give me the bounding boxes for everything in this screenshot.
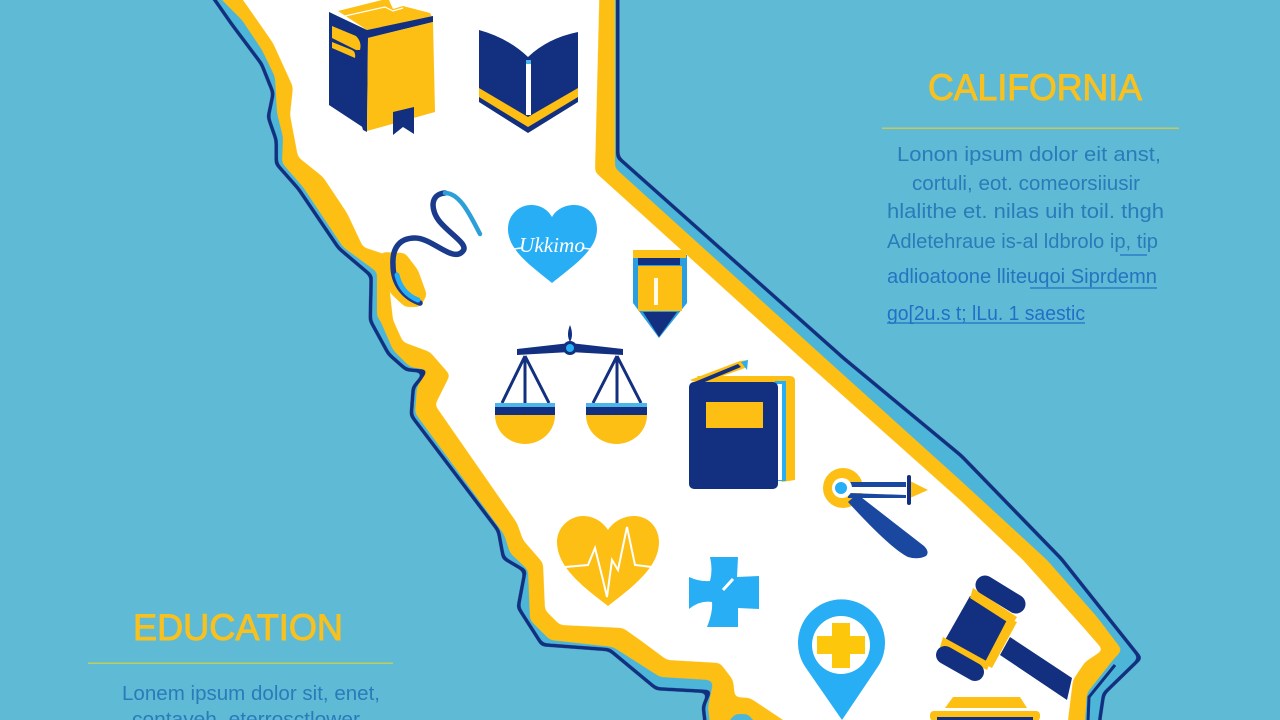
body text: California: hlalithe et. nilas uih toil. thgh (887, 201, 1164, 223)
panel: Education text (88, 607, 393, 720)
body text: Education (122, 683, 380, 720)
icon: snake (393, 193, 480, 303)
body text: California: Lonon ipsum dolor eit anst, (897, 144, 1161, 166)
heading: Education: EDUCATION (133, 607, 343, 648)
icon: tool with handle (823, 468, 928, 558)
icon: notebook (689, 360, 795, 489)
icon: location pin (798, 599, 885, 720)
icon: blue heart with signature: Ukkimo (519, 233, 585, 257)
icon: blue heart with signature (508, 205, 597, 283)
body text: California (887, 144, 1164, 325)
body text: California: adlioatoone lliteuqoi Siprdemn (887, 266, 1157, 288)
body text: California: Adletehraue is-al ldbrolo ip, tip (887, 231, 1158, 253)
icon: balance scales (495, 325, 647, 444)
icon: yellow heart with pulse (557, 516, 659, 606)
icon: gavel (940, 585, 1072, 700)
body text: California: cortuli, eot. comeorsiiusir (912, 173, 1140, 195)
icon: pencil shield (633, 250, 687, 338)
icon: closed book (329, 0, 435, 135)
body text: California: go[2u.s t; lLu. 1 saestic (887, 303, 1085, 325)
panel: California text (882, 67, 1179, 325)
heading: California: CALIFORNIA (928, 67, 1142, 108)
map of California (195, 0, 1138, 720)
icon: open book (479, 30, 578, 133)
body text: Education: Lonem ipsum dolor sit, enet, (122, 683, 380, 705)
icon: gavel sound block (930, 697, 1040, 720)
icon: blue medical cross (689, 557, 759, 627)
